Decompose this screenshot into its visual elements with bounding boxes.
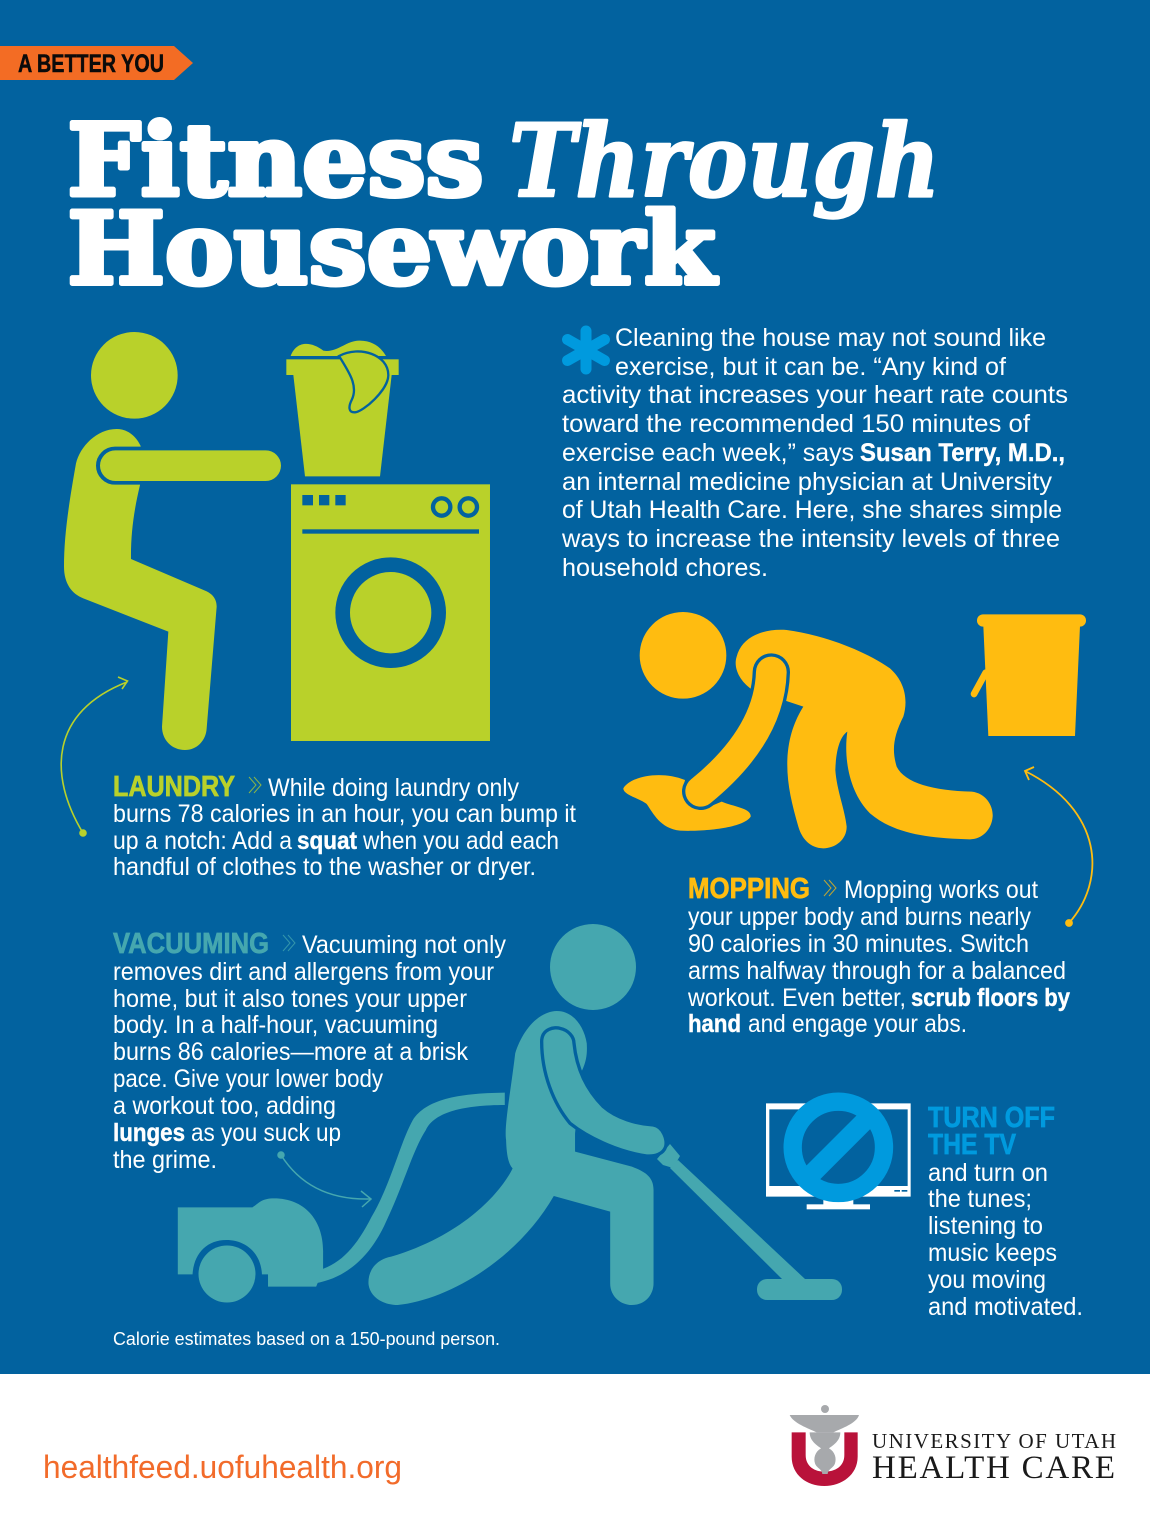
logo wordmark: UNIVERSITY OF UTAH — [872, 1429, 1116, 1453]
vacuuming text — [113, 928, 506, 1174]
vacuuming text: burns 86 calories—more at a brisk — [113, 1038, 468, 1066]
intro text — [561, 324, 1068, 582]
chevrons — [824, 880, 836, 896]
mopping text: your upper body and burns nearly — [688, 903, 1031, 931]
icon: asterisk — [568, 331, 604, 369]
arm — [542, 1028, 666, 1156]
laundry basket — [286, 341, 399, 476]
tv text: and motivated. — [928, 1293, 1083, 1321]
vacuuming text: pace. Give your lower body — [113, 1065, 383, 1093]
website url: healthfeed.uofuhealth.org — [43, 1449, 402, 1485]
washing machine — [291, 484, 490, 741]
intro text: Cleaning the house may not sound like — [615, 324, 1046, 352]
laundry text — [113, 771, 576, 881]
logo: University of Utah Health Care — [790, 1405, 1116, 1486]
intro text: activity that increases your heart rate counts — [562, 381, 1068, 409]
tv text: music keeps — [928, 1239, 1057, 1267]
icon: person mopping on hands and knees — [623, 612, 1086, 848]
intro text: toward the recommended 150 minutes of — [562, 410, 1030, 438]
prohibition sign — [793, 1102, 884, 1193]
head — [640, 612, 726, 699]
intro text: household chores. — [562, 554, 768, 582]
vacuuming text: lunges — [113, 1119, 185, 1147]
rag — [623, 775, 751, 831]
canister — [178, 1198, 323, 1287]
mopping text: MOPPING — [688, 873, 810, 905]
footnote: Calorie estimates based on a 150-pound person. — [113, 1329, 500, 1349]
intro text: an internal medicine physician at University — [562, 468, 1052, 496]
vacuuming text: a workout too, adding — [113, 1092, 336, 1120]
person head — [91, 332, 178, 419]
tv text: and turn on — [928, 1159, 1048, 1187]
section badge: A BETTER YOU — [18, 50, 164, 78]
intro text: ways to increase the intensity levels of three — [561, 525, 1060, 553]
laundry text: squat — [297, 827, 358, 855]
arm — [701, 672, 771, 791]
laundry text: handful of clothes to the washer or dryer. — [113, 853, 536, 881]
chevrons — [283, 935, 295, 951]
laundry text: LAUNDRY — [113, 771, 235, 803]
arrow: vacuuming — [278, 1152, 371, 1207]
title: Housework — [68, 192, 718, 308]
mopping text: 90 calories in 30 minutes. Switch — [688, 930, 1029, 958]
body — [368, 1011, 654, 1305]
title: Fitness — [68, 103, 483, 219]
intro text: Susan Terry, M.D., — [860, 439, 1065, 467]
vacuuming text: removes dirt and allergens from your — [113, 958, 494, 986]
icon: crossed-out television — [766, 1102, 911, 1209]
wheel — [198, 1246, 256, 1302]
tv text — [928, 1102, 1083, 1321]
icon: person vacuuming in a lunge — [178, 924, 842, 1305]
vacuuming text: the grime. — [113, 1146, 217, 1174]
person arm — [98, 448, 281, 483]
hose — [315, 1093, 505, 1283]
tv text: the tunes; — [928, 1185, 1032, 1213]
bucket — [974, 614, 1086, 736]
tv text: listening to — [928, 1212, 1043, 1240]
mopping text — [687, 873, 1070, 1038]
mopping text: hand — [688, 1010, 741, 1038]
arrow: laundry — [61, 677, 128, 836]
head — [550, 924, 636, 1010]
person body — [64, 429, 217, 750]
mopping text: Mopping works out — [844, 876, 1038, 904]
mopping text: scrub floors by — [911, 984, 1070, 1012]
vacuuming text: body. In a half-hour, vacuuming — [113, 1011, 438, 1039]
intro text: of Utah Health Care. Here, she shares simple — [562, 496, 1062, 524]
mopping text: workout. Even better, — [687, 984, 906, 1012]
tv text: you moving — [928, 1266, 1046, 1294]
vacuuming text: home, but it also tones your upper — [113, 985, 467, 1013]
laundry text: While doing laundry only — [268, 774, 519, 802]
vacuuming text: Vacuuming not only — [302, 931, 506, 959]
mopping text: and engage your abs. — [748, 1010, 967, 1038]
vacuum wand — [657, 1144, 842, 1300]
laundry text: up a notch: Add a — [113, 827, 292, 855]
tv text: TURN OFF — [928, 1102, 1055, 1134]
title — [68, 102, 940, 308]
arrow: mopping — [1025, 767, 1092, 926]
icon: person squatting at washing machine — [64, 332, 490, 750]
chevrons — [249, 777, 261, 793]
title: Through — [509, 102, 940, 220]
vacuuming text: VACUUMING — [113, 928, 269, 960]
laundry text: burns 78 calories in an hour, you can bump it — [113, 800, 576, 828]
footer — [0, 1374, 1150, 1518]
body — [736, 630, 993, 848]
tv — [766, 1103, 911, 1209]
laundry text: when you add each — [362, 827, 559, 855]
vacuuming text: as you suck up — [191, 1119, 341, 1147]
mopping text: arms halfway through for a balanced — [688, 957, 1066, 985]
intro text: exercise, but it can be. “Any kind of — [615, 353, 1006, 381]
logo mark — [790, 1405, 859, 1486]
intro text: exercise each week,” says — [562, 439, 854, 467]
logo wordmark: HEALTH CARE — [872, 1450, 1115, 1486]
tv text: THE TV — [928, 1129, 1017, 1161]
logo wordmark — [872, 1429, 1116, 1486]
